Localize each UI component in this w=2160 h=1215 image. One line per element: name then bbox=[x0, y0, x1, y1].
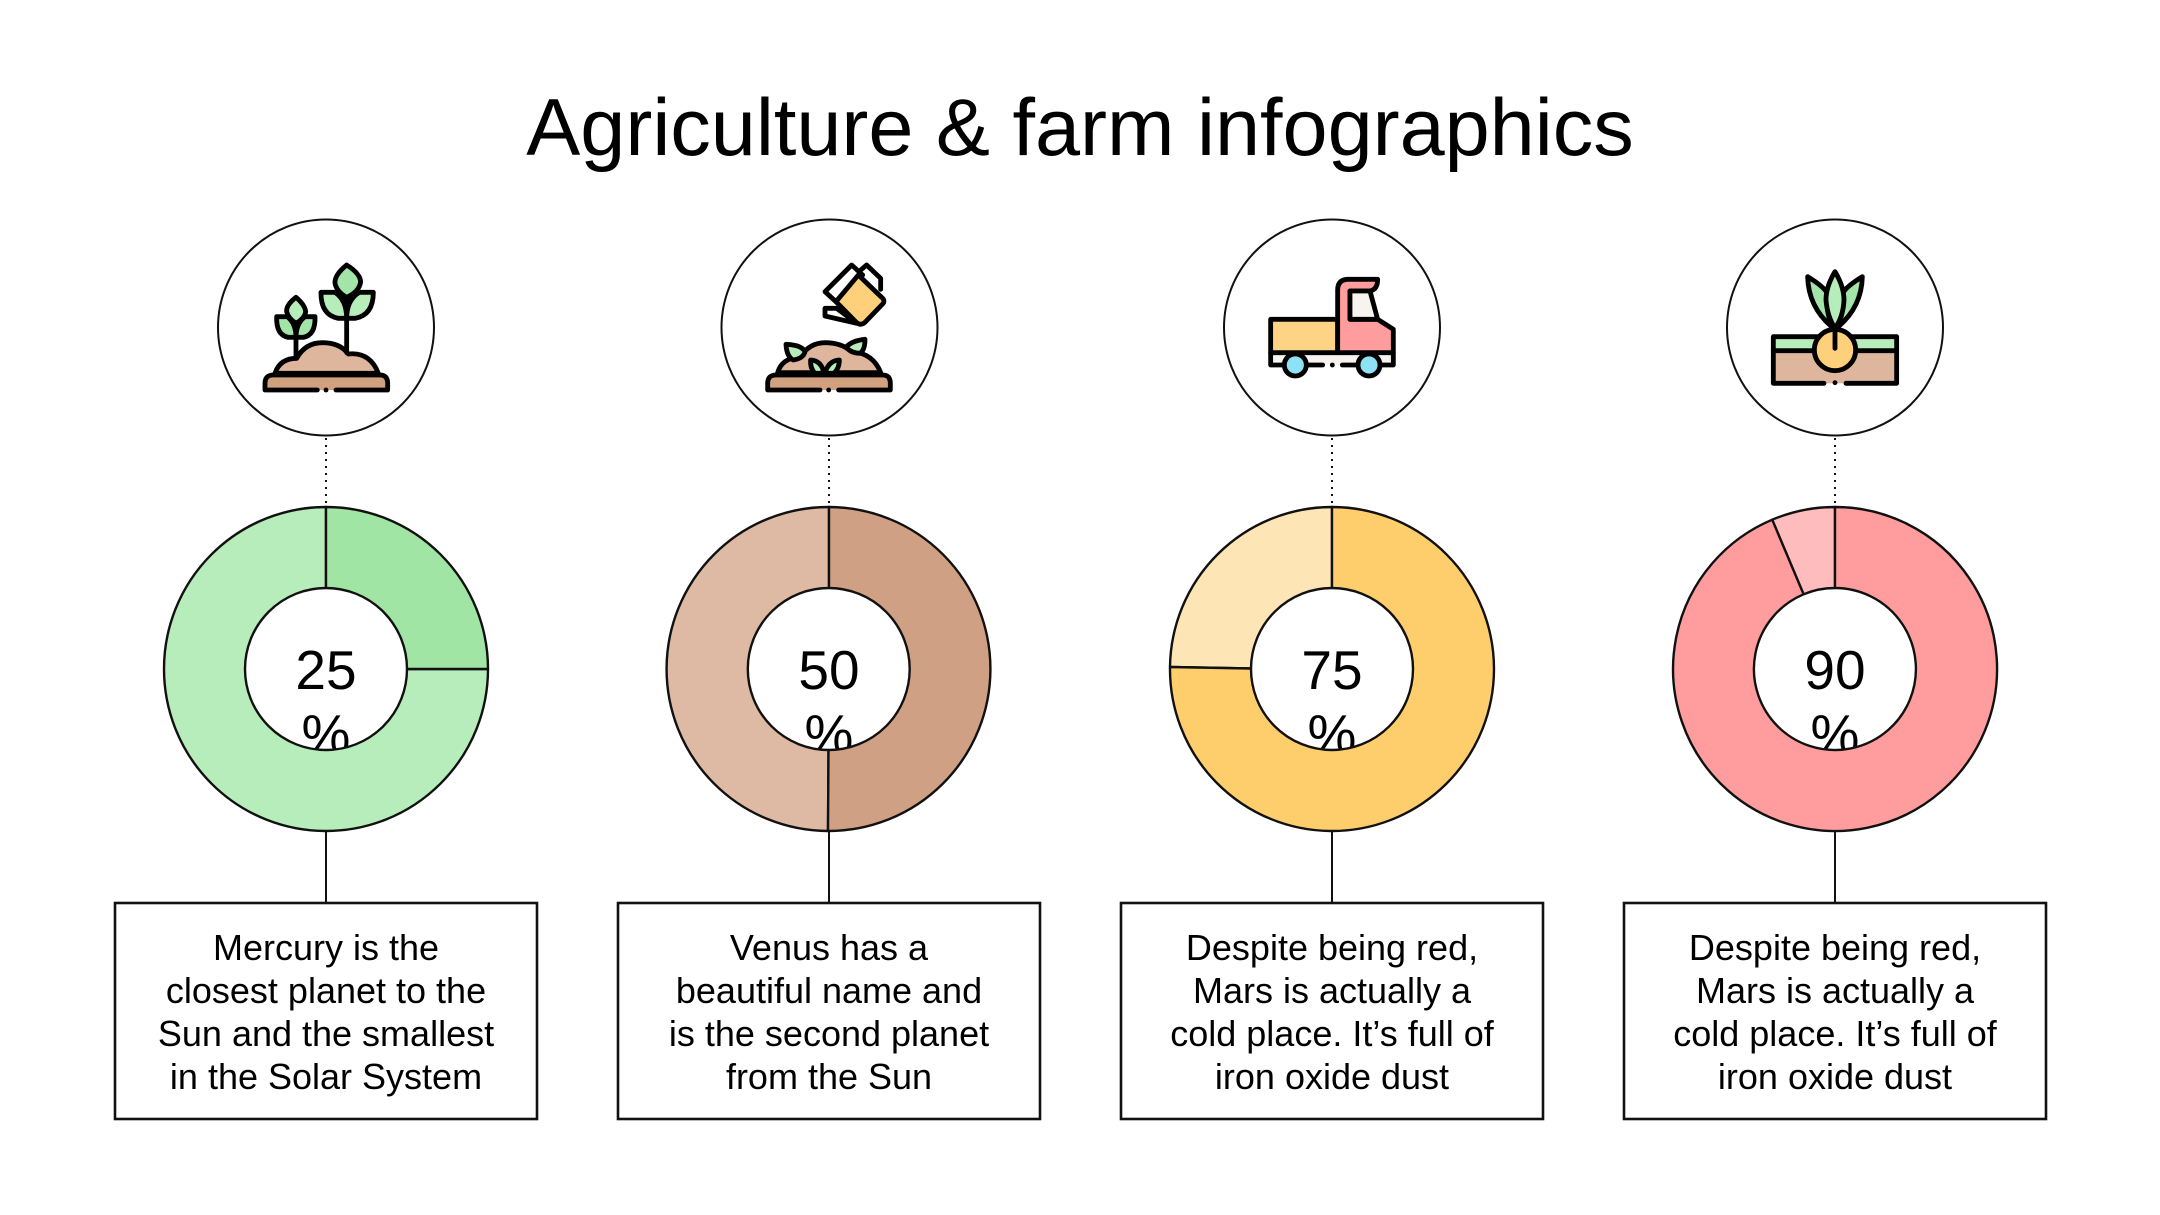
icon circle: truck bbox=[1224, 220, 1440, 436]
column 2: Venus 50% bbox=[618, 220, 1040, 1119]
percentage label 75 bbox=[1301, 639, 1363, 765]
donut chart 25% bbox=[164, 507, 488, 831]
description box: cold place. It’s full of bbox=[1170, 1013, 1495, 1054]
description box: Despite being red, bbox=[1689, 927, 1981, 968]
description box: Mercury is the bbox=[213, 927, 439, 968]
column 1: Mercury 25% bbox=[115, 220, 537, 1119]
description box bbox=[618, 903, 1040, 1119]
percentage label 25: % bbox=[302, 703, 350, 765]
icon circle: bulb sprout bbox=[1727, 220, 1943, 436]
percentage label 50: 50 bbox=[798, 639, 860, 701]
percentage label 25: 25 bbox=[295, 639, 357, 701]
donut chart 75% bbox=[1170, 507, 1494, 831]
description box: from the Sun bbox=[726, 1056, 932, 1097]
icon circle: plants bbox=[218, 220, 434, 436]
description box: Sun and the smallest bbox=[158, 1013, 494, 1054]
description box: Despite being red, bbox=[1186, 927, 1478, 968]
percentage label 90 bbox=[1804, 639, 1866, 765]
description box: Mars is actually a bbox=[1696, 970, 1975, 1011]
percentage label 90: % bbox=[1811, 703, 1859, 765]
icon circle: watering can bbox=[722, 220, 938, 436]
description box: iron oxide dust bbox=[1215, 1056, 1449, 1097]
description box: cold place. It’s full of bbox=[1673, 1013, 1998, 1054]
percentage label 90: 90 bbox=[1804, 639, 1866, 701]
donut chart 50% bbox=[667, 507, 990, 831]
description box: closest planet to the bbox=[166, 970, 486, 1011]
description box: Venus has a bbox=[730, 927, 929, 968]
description box bbox=[115, 903, 537, 1119]
percentage label 75: % bbox=[1308, 703, 1356, 765]
percentage label 75: 75 bbox=[1301, 639, 1363, 701]
description box: iron oxide dust bbox=[1718, 1056, 1952, 1097]
percentage label 50: % bbox=[805, 703, 853, 765]
title: Agriculture & farm infographics bbox=[526, 83, 1634, 173]
description box: Mars is actually a bbox=[1193, 970, 1472, 1011]
percentage label 25 bbox=[295, 639, 357, 765]
column 4: Mars 90% bbox=[1624, 220, 2046, 1119]
description box: in the Solar System bbox=[170, 1056, 482, 1097]
description box bbox=[1121, 903, 1543, 1119]
percentage label 50 bbox=[798, 639, 860, 765]
description box: beautiful name and bbox=[676, 970, 982, 1011]
description box bbox=[1624, 903, 2046, 1119]
description box: is the second planet bbox=[669, 1013, 989, 1054]
donut chart 90% bbox=[1673, 507, 1997, 831]
column 3: Mars 75% bbox=[1121, 220, 1543, 1119]
